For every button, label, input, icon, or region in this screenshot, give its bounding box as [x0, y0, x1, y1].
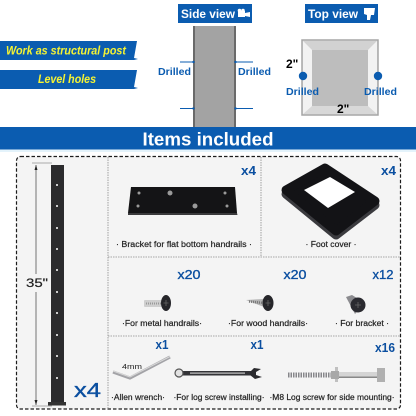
foot cover caption: · Foot cover · — [306, 240, 356, 249]
quantity x1: x1 — [156, 337, 168, 352]
drill holes and dimensions — [286, 57, 397, 116]
heading band: items included — [0, 127, 416, 152]
banner: level holes — [0, 70, 138, 89]
metal screw caption: ·For metal handrails· — [122, 319, 202, 328]
log screw item — [270, 340, 395, 402]
bracket item — [116, 163, 257, 249]
banner: work as structural post: Work as structural post — [6, 46, 127, 58]
bracket screw — [346, 295, 366, 314]
quantity x4: x4 — [381, 163, 397, 178]
log screw caption: ·M8 Log screw for side mounting· — [270, 393, 394, 402]
post side elevation — [193, 26, 236, 127]
contents panel — [16, 156, 400, 409]
drill holes and dimensions: Drilled — [286, 87, 319, 98]
square tube section — [302, 40, 378, 115]
side view label: Side view — [181, 7, 236, 21]
quantity x16: x16 — [375, 340, 395, 355]
foot cover — [286, 168, 375, 235]
allen wrench item — [111, 337, 170, 402]
allen wrench caption: ·Allen wrench· — [111, 393, 165, 402]
allen wrench — [113, 356, 170, 378]
bracket caption: · Bracket for flat bottom handrails · — [116, 240, 252, 249]
post height dimension: 35" — [26, 276, 48, 290]
post item — [25, 163, 101, 406]
quantity x20: x20 — [284, 267, 306, 282]
heading band: items included: Items included — [142, 130, 274, 150]
wood screw — [246, 295, 274, 311]
bracket plate — [128, 187, 238, 215]
black post — [48, 165, 66, 406]
quantity x20: x20 — [178, 267, 200, 282]
side view diagram — [158, 4, 271, 127]
banner: level holes: Level holes — [38, 74, 96, 86]
banner: work as structural post — [0, 41, 138, 60]
post height dimension — [25, 163, 52, 406]
drill holes and dimensions: Drilled — [364, 87, 397, 98]
wood screw caption: ·For wood handrails· — [228, 319, 308, 328]
quantity x4: x4 — [74, 380, 101, 402]
drilled markers: Drilled — [158, 67, 191, 78]
top view label: Top view — [308, 7, 359, 21]
drilled markers — [158, 61, 271, 110]
bracket screw item — [335, 267, 394, 328]
quantity x1: x1 — [250, 337, 264, 352]
spanner caption: ·For log screw installing· — [174, 393, 264, 402]
spanner — [175, 368, 262, 379]
wood handrail screw item — [228, 267, 308, 328]
machine screw — [144, 295, 171, 311]
4mm label: 4mm — [122, 362, 142, 371]
metal handrail screw item — [122, 267, 202, 328]
quantity x12: x12 — [372, 267, 394, 282]
log screw — [288, 367, 385, 382]
drill holes and dimensions: 2" — [286, 57, 298, 71]
drilled markers: Drilled — [238, 67, 271, 78]
bracket screw caption: · For bracket · — [335, 319, 389, 328]
spanner item — [174, 337, 264, 402]
quantity x4: x4 — [241, 163, 257, 178]
drill holes and dimensions: 2" — [337, 102, 349, 116]
foot cover item — [286, 163, 397, 249]
top view diagram — [286, 4, 397, 116]
